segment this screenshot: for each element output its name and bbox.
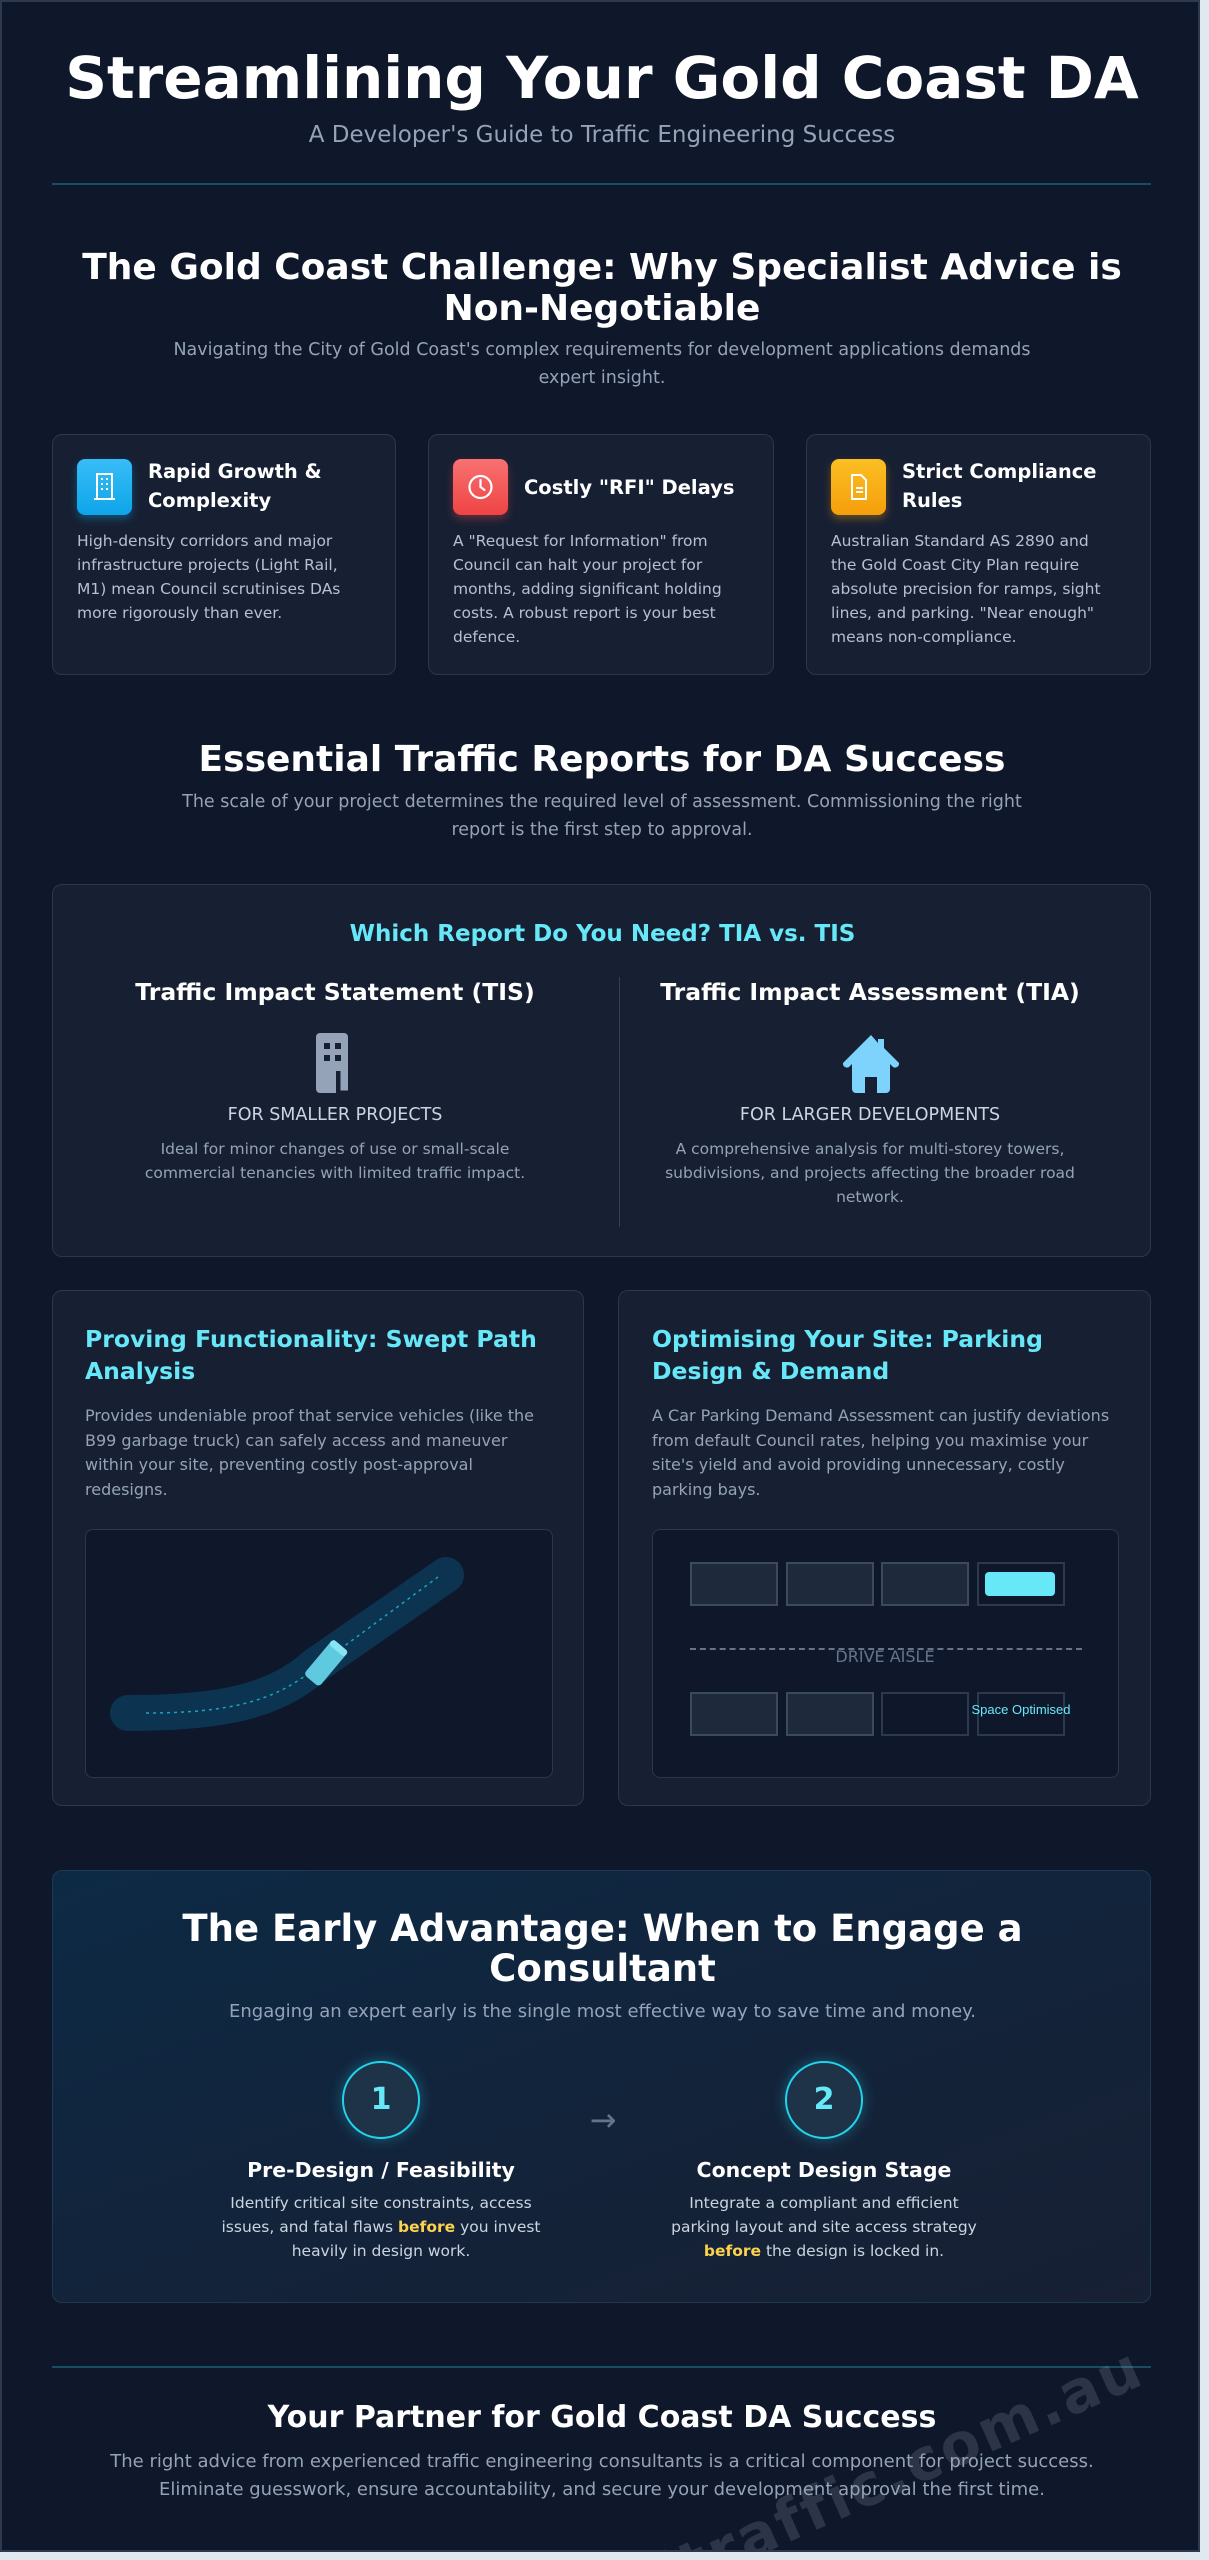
panel heading: The Early Advantage: When to Engage a Consultant xyxy=(182,1907,1023,1990)
diagram: parking layout xyxy=(652,1529,1119,1778)
panel: early advantage xyxy=(52,1870,1151,2303)
card title: Rules xyxy=(902,489,962,512)
label: space optimised: Space Optimised xyxy=(972,1702,1070,1717)
heading: gold coast challenge: The Gold Coast Challenge: Why Specialist Advice is xyxy=(82,247,1122,288)
panel: parking xyxy=(618,1290,1151,1806)
step 2 xyxy=(671,2054,977,2260)
step 2: Concept Design Stage xyxy=(697,2158,951,2182)
card: compliance xyxy=(806,434,1151,675)
column: TIA: A comprehensive analysis for multi-storey towers, subdivisions, and projects affecting the broader road network. xyxy=(665,1140,1075,1206)
subtitle: A Developer's Guide to Traffic Engineering Success xyxy=(309,122,895,148)
intro text: challenge: Navigating the City of Gold Coast's complex requirements for development applications demands expert insight. xyxy=(173,340,1031,388)
card title xyxy=(902,460,1097,512)
icon: step number 1 xyxy=(342,2061,420,2139)
icon: vehicle xyxy=(304,1639,348,1687)
column: TIS xyxy=(135,978,535,1182)
arrow: → xyxy=(590,2101,616,2139)
panel: swept path xyxy=(52,1290,584,1806)
step 1: Pre-Design / Feasibility xyxy=(247,2158,515,2182)
card: rapid growth xyxy=(52,434,396,675)
card title: Strict Compliance xyxy=(902,460,1097,483)
step 2: Integrate a compliant and efficient parking layout and site access strategy before the design is locked in. xyxy=(671,2194,977,2260)
intro text: reports: The scale of your project determines the required level of assessment. Commissioning the right report is the first step to approval. xyxy=(182,792,1022,840)
card body: A "Request for Information" from Council can halt your project for months, adding significant holding costs. A robust report is your best defence. xyxy=(453,532,722,646)
icon: step number 1: 1 xyxy=(371,2082,391,2117)
footer text: The right advice from experienced traffic engineering consultants is a critical component for project success. Eliminate guesswork, ensure accountability, and secure your development approval the first time. xyxy=(110,2451,1094,2500)
panel heading: Which Report Do You Need? TIA vs. TIS xyxy=(350,921,855,947)
icon: building xyxy=(316,1033,348,1093)
title: Streamlining Your Gold Coast DA xyxy=(65,44,1139,112)
column: TIA: FOR LARGER DEVELOPMENTS xyxy=(740,1105,1000,1125)
panel text: Engaging an expert early is the single most effective way to save time and money. xyxy=(229,2001,976,2022)
card title xyxy=(148,460,322,512)
icon: step number 2 xyxy=(785,2061,863,2139)
card title: Rapid Growth & xyxy=(148,460,322,483)
heading: essential reports: Essential Traffic Reports for DA Success xyxy=(199,739,1005,780)
icon: clock xyxy=(453,459,508,515)
column: TIS: FOR SMALLER PROJECTS xyxy=(228,1105,442,1125)
icon: document xyxy=(831,459,886,515)
column: TIS: Traffic Impact Statement (TIS) xyxy=(135,978,535,1006)
panel heading: Optimising Your Site: Parking Design & Demand xyxy=(652,1325,1043,1385)
icon: step number 2: 2 xyxy=(814,2082,834,2117)
icon: house xyxy=(842,1035,900,1093)
label: drive aisle: DRIVE AISLE xyxy=(835,1647,935,1666)
step 1: Identify critical site constraints, access issues, and fatal flaws before you invest heavily in design work. xyxy=(221,2194,541,2260)
diagram: swept path xyxy=(85,1529,553,1778)
heading: gold coast challenge xyxy=(82,247,1122,329)
card title: Complexity xyxy=(148,489,271,512)
card body: High-density corridors and major infrastructure projects (Light Rail, M1) mean Council scrutinises DAs more rigorously than ever. xyxy=(77,532,340,622)
footer heading: Your Partner for Gold Coast DA Success xyxy=(268,2400,936,2435)
step 1 xyxy=(221,2054,541,2260)
card: rfi delays xyxy=(428,434,774,675)
panel heading: Proving Functionality: Swept Path Analysis xyxy=(85,1325,537,1385)
column: TIA xyxy=(660,978,1080,1206)
card title: Costly "RFI" Delays xyxy=(524,476,734,499)
panel text: A Car Parking Demand Assessment can justify deviations from default Council rates, helping you maximise your site's yield and avoid providing unnecessary, costly parking bays. xyxy=(652,1406,1109,1498)
heading: gold coast challenge: Non-Negotiable xyxy=(444,288,760,329)
icon: building xyxy=(77,459,132,515)
panel: TIA vs TIS xyxy=(52,884,1151,1257)
column: TIS: Ideal for minor changes of use or small-scale commercial tenancies with limited traffic impact. xyxy=(145,1140,525,1182)
card body: Australian Standard AS 2890 and the Gold Coast City Plan require absolute precision for ramps, sight lines, and parking. "Near enough" means non-compliance. xyxy=(831,532,1101,646)
panel text: Provides undeniable proof that service vehicles (like the B99 garbage truck) can safely access and maneuver within your site, preventing costly post-approval redesigns. xyxy=(85,1406,534,1498)
column: TIA: Traffic Impact Assessment (TIA) xyxy=(660,978,1080,1006)
